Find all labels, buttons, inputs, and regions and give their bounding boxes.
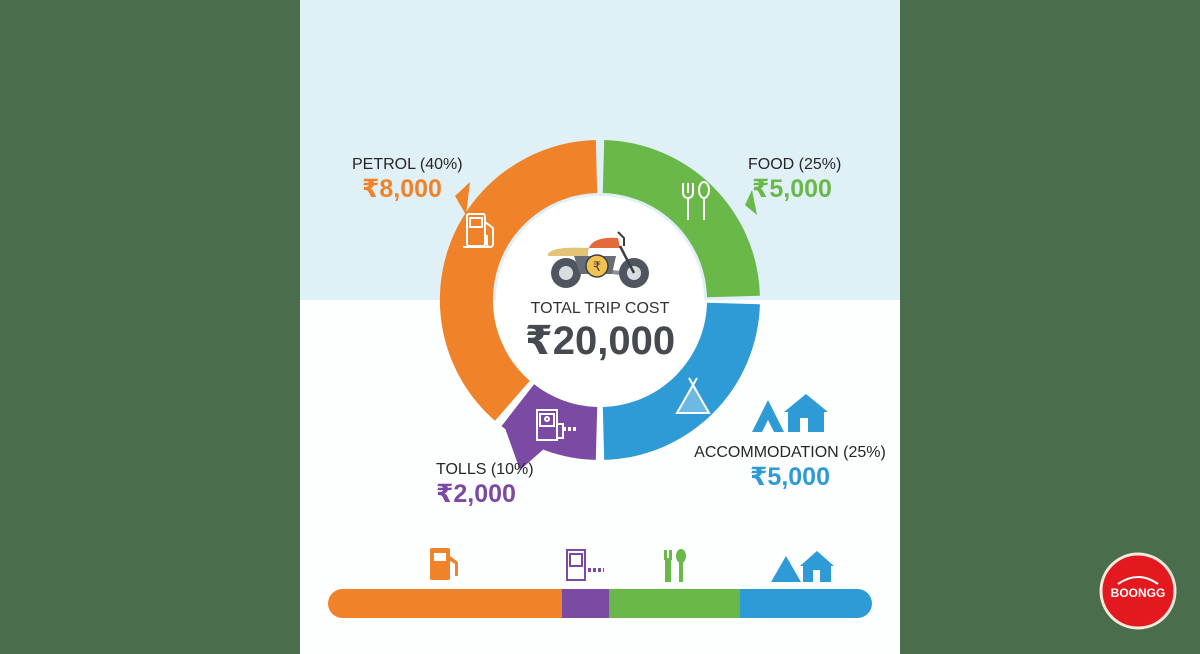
segment: tolls (502, 384, 597, 470)
segment: food (603, 140, 760, 297)
label: food (748, 156, 841, 203)
icon: tent in donut (677, 378, 709, 413)
icon: fuel pump in donut (463, 214, 493, 247)
icon: tent and house (accommodation label) (752, 394, 828, 432)
label: tolls: ₹2,000 (436, 480, 516, 508)
text: total label: TOTAL TRIP COST (531, 300, 669, 317)
logo badge: BOONGG (1111, 586, 1165, 600)
label: petrol (352, 156, 463, 203)
icon: toll booth in donut (537, 410, 578, 440)
text: total value: ₹20,000 (525, 319, 675, 363)
label: food: FOOD (25%) (748, 156, 841, 173)
panel: main card (300, 0, 900, 654)
label: accommodation (694, 444, 886, 491)
icon: tent and house (bar) (771, 551, 834, 582)
label: tolls (436, 461, 534, 508)
center circle (496, 196, 704, 404)
label: petrol: ₹8,000 (362, 175, 442, 203)
segment: petrol (440, 140, 597, 421)
panel: light blue header band (300, 0, 900, 300)
icon: fork and spoon (683, 182, 709, 220)
icon: fork and spoon (bar) (664, 549, 686, 582)
label: tolls: TOLLS (10%) (436, 461, 534, 478)
logo badge (1101, 554, 1175, 628)
segment: accommodation (603, 303, 760, 460)
label: food: ₹5,000 (752, 175, 832, 203)
icon: toll booth (bar) (567, 550, 604, 580)
label: accommodation: ACCOMMODATION (25%) (694, 444, 886, 461)
icon: motorcycle (548, 232, 649, 288)
icon: fuel pump (bar) (430, 548, 458, 580)
stacked bar (328, 589, 872, 618)
label: accommodation: ₹5,000 (750, 463, 830, 491)
icons and bar (328, 394, 1176, 630)
icon: motorcycle: ₹ (593, 259, 601, 274)
label: petrol: PETROL (40%) (352, 156, 463, 173)
